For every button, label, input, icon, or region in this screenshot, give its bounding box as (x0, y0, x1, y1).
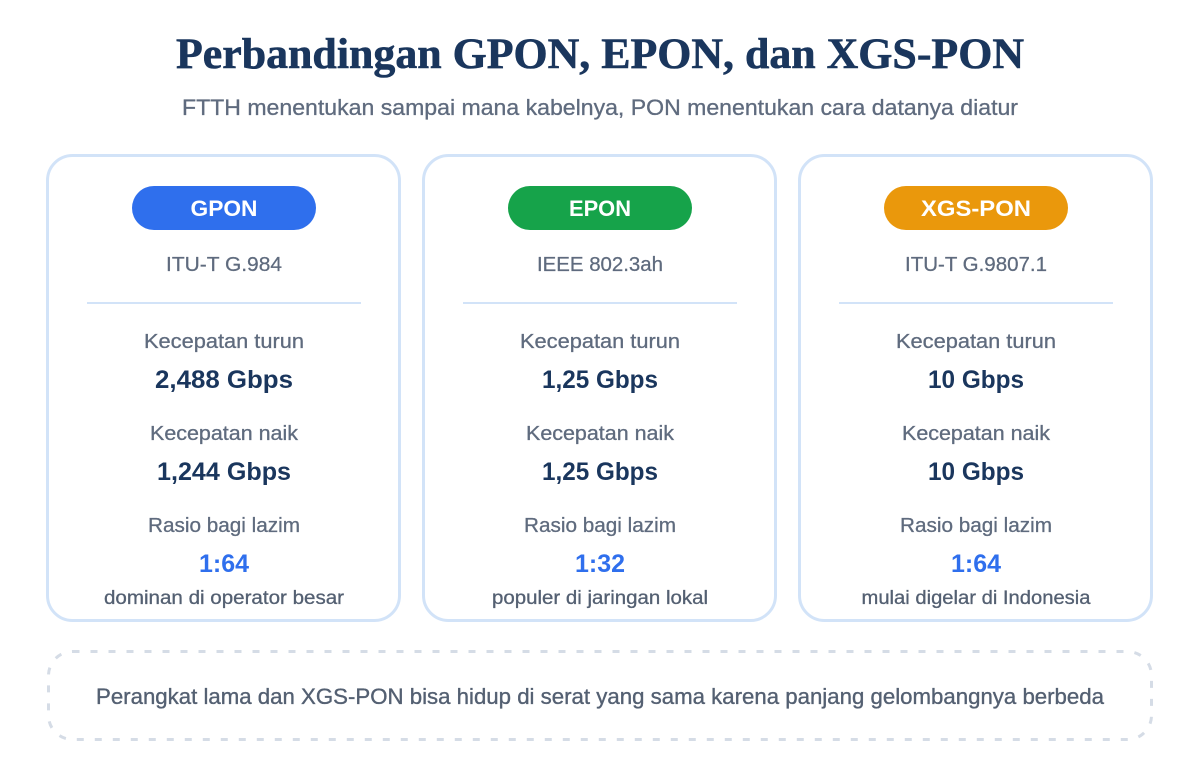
title: Perbandingan GPON, EPON, dan XGS-PON (176, 31, 1024, 78)
split ratio value: 1:64 (199, 550, 249, 578)
split ratio value: 1:64 (951, 550, 1001, 578)
card frame (48, 156, 400, 620)
upstream value: 1,244 Gbps (157, 458, 291, 486)
standard: ITU-T G.984 (166, 253, 282, 276)
upstream value: 1,25 Gbps (542, 458, 658, 486)
callout text: Perangkat lama dan XGS-PON bisa hidup di serat yang sama karena panjang gelombangnya berbeda (96, 684, 1105, 709)
badge: XGS-PON (884, 186, 1068, 230)
panel: GPON (48, 156, 400, 620)
downstream value: 10 Gbps (928, 366, 1024, 394)
split ratio label: Rasio bagi lazim (900, 514, 1052, 537)
split ratio label: Rasio bagi lazim (148, 514, 300, 537)
downstream label: Kecepatan turun (896, 330, 1056, 353)
panel: EPON (424, 156, 776, 620)
note: populer di jaringan lokal (492, 587, 708, 609)
split ratio label: Rasio bagi lazim (524, 514, 676, 537)
callout: footer note (48, 652, 1152, 740)
card frame (424, 156, 776, 620)
panel: XGS-PON (800, 156, 1152, 620)
upstream label: Kecepatan naik (902, 422, 1051, 445)
downstream label: Kecepatan turun (520, 330, 680, 353)
subtitle: FTTH menentukan sampai mana kabelnya, PON menentukan cara datanya diatur (182, 95, 1018, 120)
upstream label: Kecepatan naik (526, 422, 675, 445)
upstream value: 10 Gbps (928, 458, 1024, 486)
badge: GPON (132, 186, 316, 230)
note: mulai digelar di Indonesia (862, 587, 1091, 609)
note: dominan di operator besar (104, 587, 345, 609)
downstream value: 2,488 Gbps (155, 366, 293, 394)
standard: ITU-T G.9807.1 (905, 253, 1047, 276)
badge: GPON: GPON (190, 196, 258, 221)
downstream value: 1,25 Gbps (542, 366, 658, 394)
badge: EPON (508, 186, 692, 230)
card frame (800, 156, 1152, 620)
standard: IEEE 802.3ah (537, 253, 663, 276)
badge: EPON: EPON (569, 196, 631, 221)
downstream label: Kecepatan turun (144, 330, 304, 353)
split ratio value: 1:32 (575, 550, 625, 578)
upstream label: Kecepatan naik (150, 422, 299, 445)
badge: XGS-PON: XGS-PON (921, 196, 1031, 221)
